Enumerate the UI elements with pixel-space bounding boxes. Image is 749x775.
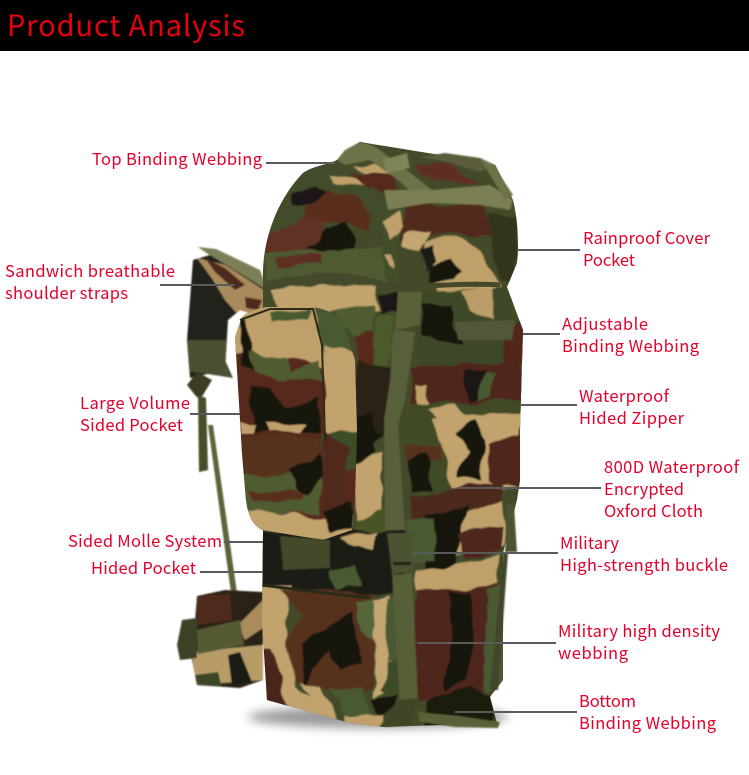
label: adjustable binding webbing: Adjustable	[562, 311, 648, 335]
elastic cord	[268, 276, 500, 288]
label: hided pocket: Hided Pocket	[91, 555, 196, 579]
side pocket	[235, 307, 357, 540]
backpack illustration	[177, 135, 530, 735]
middle body camouflage	[352, 360, 525, 545]
label: sandwich breathable shoulder straps: shoulder straps	[5, 280, 128, 304]
label: large volume sided pocket: Large Volume	[80, 390, 190, 414]
label: sandwich breathable shoulder straps: Sandwich breathable	[5, 258, 175, 282]
label: 800D waterproof encrypted oxford cloth: Oxford Cloth	[604, 498, 703, 522]
molle pouch	[280, 536, 330, 570]
body base	[255, 135, 530, 735]
lower right camouflage	[405, 480, 510, 730]
camouflage patches	[255, 160, 525, 735]
shoulder strap	[186, 246, 263, 592]
upper body camouflage	[270, 285, 525, 460]
lower left camouflage	[255, 530, 408, 735]
label: bottom binding webbing: Bottom	[579, 688, 636, 712]
header bar	[0, 0, 749, 51]
label: waterproof hided zipper: Waterproof	[579, 383, 670, 407]
label: rainproof cover pocket: Rainproof Cover	[583, 225, 711, 249]
label: large volume sided pocket: Sided Pocket	[80, 412, 183, 436]
label: military high-strength buckle: Military	[560, 530, 619, 554]
label: military high density webbing: webbing	[558, 640, 629, 664]
label: waterproof hided zipper: Hided Zipper	[579, 405, 685, 429]
title: Product Analysis	[7, 3, 245, 45]
label: 800D waterproof encrypted oxford cloth: 800D Waterproof	[604, 454, 740, 478]
main body	[255, 135, 530, 735]
label: rainproof cover pocket: Pocket	[583, 247, 635, 271]
label: adjustable binding webbing: Binding Webbing	[562, 333, 700, 357]
hip belt pouch	[177, 590, 265, 690]
label: military high density webbing: Military high density	[558, 618, 720, 642]
label: top binding webbing: Top Binding Webbing	[92, 146, 263, 170]
leader lines	[160, 163, 601, 712]
label: bottom binding webbing: Binding Webbing	[579, 710, 717, 734]
label: 800D waterproof encrypted oxford cloth: Encrypted	[604, 476, 684, 500]
label: military high-strength buckle: High-strength buckle	[560, 552, 728, 576]
ground shadow	[248, 706, 508, 728]
label: sided molle system: Sided Molle System	[68, 528, 222, 552]
top webbing straps	[337, 142, 513, 210]
front compression strap and buckles	[383, 292, 517, 728]
lid camouflage	[262, 160, 517, 295]
